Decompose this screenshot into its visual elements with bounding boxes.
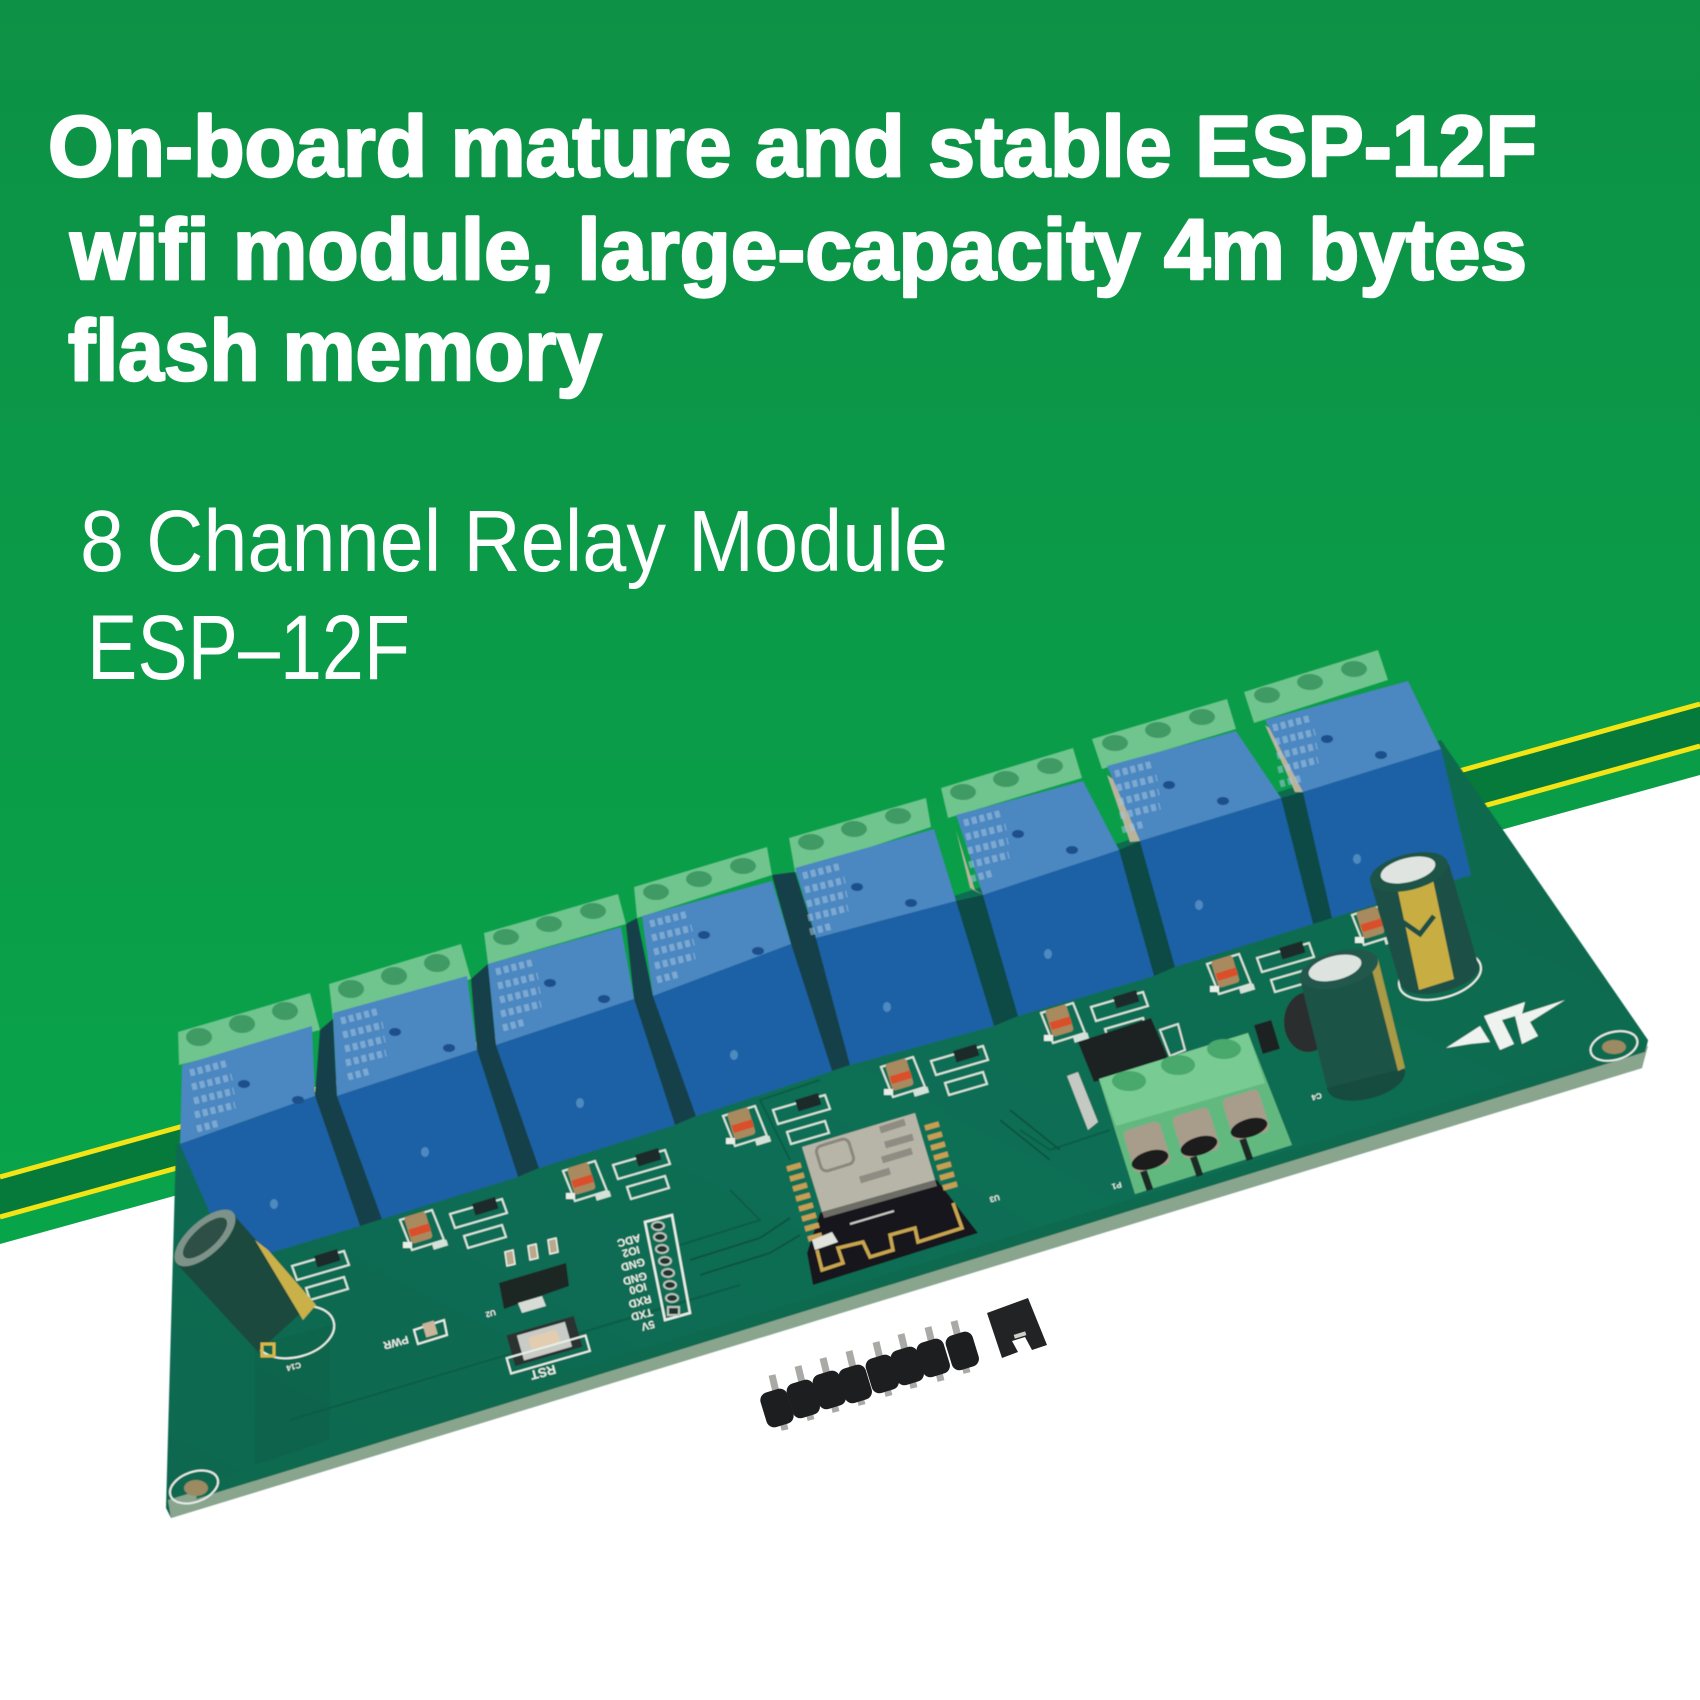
subtitle: ESP–12F [87,597,410,699]
relay gaps and shadows [315,725,1332,1226]
silkscreen labels: IO0 [628,1280,648,1296]
driver chip and crystal [1067,1018,1185,1130]
silkscreen labels: P1 [1110,1180,1123,1191]
diagonal stripe band [0,704,1700,1217]
relay 4 [634,847,832,1116]
reset button [501,1314,590,1374]
inductor and diode [1254,992,1332,1054]
silkscreen labels: TXD [630,1305,654,1323]
silkscreen labels: RST [529,1362,558,1383]
relay module board [165,650,1648,1518]
title: flash memory [68,303,602,399]
silkscreen labels: C14 [285,1360,302,1373]
silkscreen labels: PWR [382,1333,410,1351]
relay 3 [484,894,675,1168]
voltage regulator U2 [499,1238,569,1313]
relay 7 [1092,699,1313,967]
capacitor right front [1296,942,1409,1108]
silkscreen labels: GND [619,1255,646,1273]
relay 2 [329,944,518,1219]
silkscreen labels: ADC [616,1231,642,1249]
silkscreen labels: RXD [627,1292,653,1310]
silkscreen labels: C4 [1310,1091,1323,1102]
mounting holes [165,1026,1641,1510]
relay driver components [242,892,1459,1302]
silkscreen labels: U2 [484,1308,497,1319]
relay 8 [1244,650,1471,918]
subtitle [80,493,948,699]
relay 6 [941,748,1154,1016]
title: wifi module, large-capacity 4m bytes [69,202,1527,298]
title [48,99,1537,399]
silkscreen labels: 5V [639,1317,656,1333]
capacitor left [165,1200,340,1367]
silkscreen labels [285,1091,1323,1383]
pin header footprint [645,1215,690,1320]
relay 1 [178,993,360,1266]
title: On-board mature and stable ESP-12F [48,99,1537,195]
power LED [414,1320,447,1344]
silkscreen labels: U3 [988,1193,1001,1204]
green screw terminal [1099,1033,1292,1194]
ESP-12F wifi module [787,1113,978,1285]
green background [0,0,1700,1244]
manufacturer logo [1446,1000,1565,1050]
relay 5 [789,798,994,1065]
pcb base [166,740,1648,1518]
capacitor right rear [1366,845,1486,1008]
silkscreen labels: GND [621,1269,648,1287]
silkscreen labels: IO2 [621,1243,641,1259]
subtitle: 8 Channel Relay Module [80,493,948,590]
jumper cap accessory [987,1298,1047,1358]
pin header accessory [758,1321,981,1430]
